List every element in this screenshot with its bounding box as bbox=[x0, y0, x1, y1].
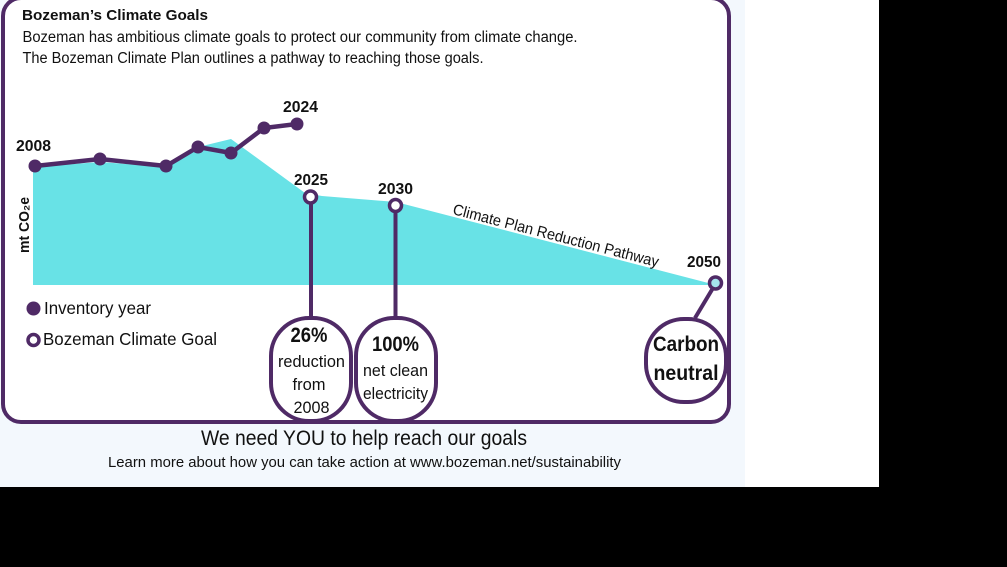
callout: carbon neutral: Carbon bbox=[653, 333, 719, 356]
callout: 26% reduction: reduction bbox=[278, 353, 345, 371]
intro text bbox=[22, 29, 578, 67]
year labels: 2030 bbox=[378, 181, 413, 198]
goal connectors bbox=[311, 197, 713, 318]
year labels: 2008 bbox=[16, 138, 51, 155]
legend bbox=[26, 298, 217, 349]
callout: 100% net clean electricity bbox=[356, 318, 436, 421]
call to action: We need YOU to help reach our goals bbox=[201, 427, 527, 450]
legend: Bozeman Climate Goal bbox=[43, 329, 217, 349]
callout: carbon neutral: neutral bbox=[654, 362, 718, 385]
footer link text: Learn more about how you can take action at www.bozeman.net/sustainability bbox=[108, 454, 621, 471]
intro text: Bozeman has ambitious climate goals to protect our community from climate change. bbox=[22, 29, 578, 46]
year labels bbox=[16, 99, 721, 271]
year labels: 2050 bbox=[687, 254, 721, 271]
chart: reduction pathway area bbox=[33, 139, 716, 285]
title: Bozeman’s Climate Goals bbox=[22, 7, 208, 24]
y axis label: mt CO₂e bbox=[16, 197, 33, 253]
callout: 100% net clean electricity: 100% bbox=[372, 333, 419, 356]
callout: 26% reduction: from bbox=[292, 376, 326, 394]
pathway label: Climate Plan Reduction Pathway bbox=[451, 201, 661, 271]
year labels: 2025 bbox=[294, 172, 328, 189]
callout: 26% reduction: 2008 bbox=[294, 399, 330, 417]
callout: 26% reduction bbox=[271, 318, 351, 421]
panel: main chart frame bbox=[3, 0, 729, 422]
intro text: The Bozeman Climate Plan outlines a pathway to reaching those goals. bbox=[22, 50, 484, 67]
callout: 26% reduction: 26% bbox=[290, 324, 328, 347]
goal markers bbox=[304, 191, 722, 289]
callout: 100% net clean electricity: electricity bbox=[363, 385, 429, 403]
line chart: inventory years bbox=[28, 118, 304, 172]
legend: Inventory year bbox=[44, 298, 151, 318]
callout: 100% net clean electricity: net clean bbox=[363, 362, 428, 380]
year labels: 2024 bbox=[283, 99, 318, 116]
callout: carbon neutral bbox=[646, 319, 726, 402]
